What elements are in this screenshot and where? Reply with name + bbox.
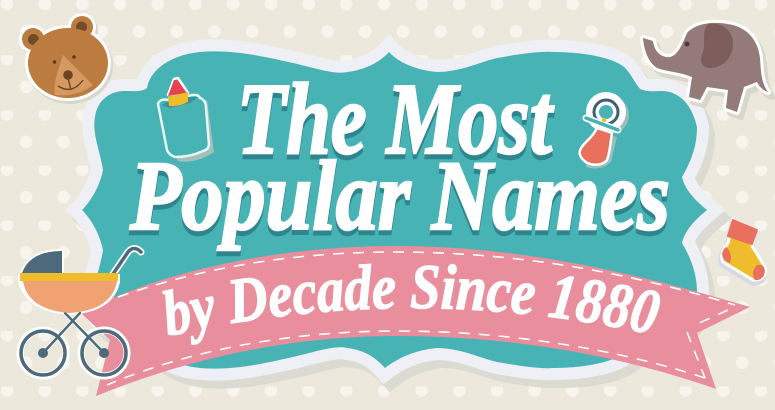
icon: elephant bbox=[643, 23, 772, 117]
title: The Most: The Most bbox=[237, 63, 554, 176]
icon: bottle bbox=[158, 78, 214, 162]
title: The Most: The Most bbox=[237, 68, 554, 181]
teal plaque frame bbox=[82, 51, 713, 377]
icon: sock bbox=[721, 220, 766, 283]
title: Popular Names: Popular Names bbox=[129, 140, 670, 251]
icon: baby stroller bbox=[20, 248, 141, 376]
ribbon banner bbox=[82, 246, 750, 396]
icon: pacifier bbox=[580, 92, 629, 169]
title: Popular Names: Popular Names bbox=[129, 145, 670, 256]
icon: teddy bear bbox=[19, 13, 113, 104]
ribbon text: by Decade Since 1880 bbox=[162, 264, 660, 345]
